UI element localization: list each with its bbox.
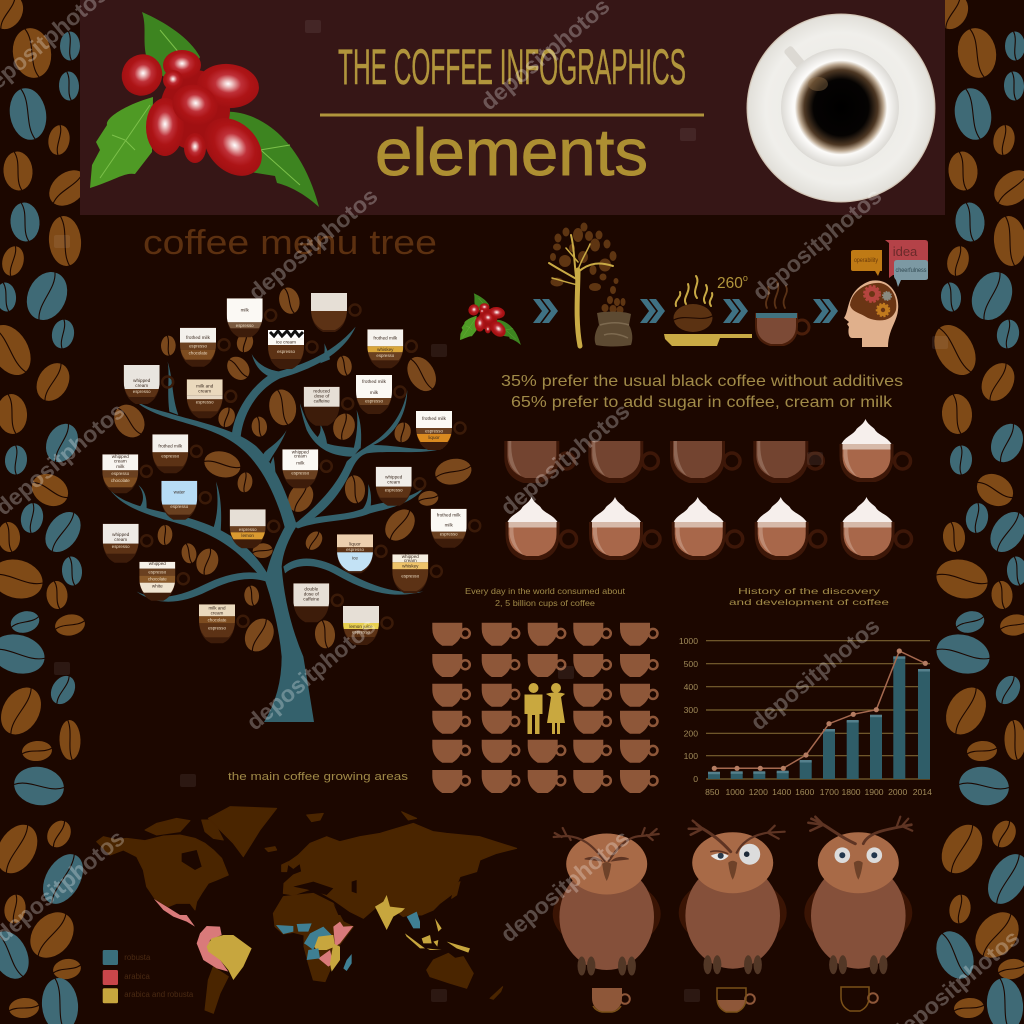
cup: reduced dose of caffeine: [304, 387, 353, 426]
heading: coffee menu tree: coffee menu tree: [143, 224, 437, 262]
cup: liquor espresso ice: ice: [352, 555, 358, 560]
x axis labels: 2000: [888, 787, 907, 797]
cup: whipped cream: cream: [135, 383, 148, 388]
cup: whipped cream whiskey: cream: [404, 558, 417, 563]
cup: liquor espresso ice: [337, 534, 386, 573]
cup: frothed milk liquor: [416, 411, 466, 450]
cup: reduced dose of caffeine: caffeine: [314, 399, 330, 404]
chart: world map: [97, 807, 517, 1013]
text: daily consumption: [465, 586, 626, 608]
cup: whipped cream milk chocolate: espresso: [111, 471, 130, 476]
icon: brewed cup with steam: [755, 282, 809, 346]
cup: reduced dose of caffeine: reduced: [313, 389, 330, 394]
cup: espresso with lemon: espresso: [239, 527, 257, 532]
cup: layered chocolate and milk: espresso: [148, 570, 167, 575]
cup: lemon juice: lemon juice: [349, 624, 373, 629]
cup: milk: espresso: [236, 323, 254, 328]
cup: frothed milk and milk: espresso: [365, 398, 383, 404]
icon: small berries: [460, 293, 521, 345]
text: preference statistics: 35% prefer the usual black coffee without additives: [501, 373, 903, 390]
x axis labels: 1900: [864, 787, 884, 797]
cup: water espresso: espresso: [170, 504, 189, 509]
cup: whipped cream milk chocolate: milk: [116, 464, 125, 469]
x axis labels: 1800: [841, 787, 861, 797]
cup: frothed milk and milk: [356, 375, 406, 414]
heading: history chart: and development of coffee: [729, 597, 889, 607]
legend: coffee species: [103, 950, 194, 1003]
icon: wide-awake owl: [804, 817, 912, 974]
cup: whipped cream espresso lower: [103, 524, 152, 563]
cup: whipped cream and milk: whipped: [292, 449, 309, 454]
icon: coffee berries and leaves: [90, 12, 319, 207]
chart: history bar and line chart: [679, 636, 932, 797]
text: daily consumption: Every day in the world consumed about: [465, 586, 626, 596]
cup: espresso with lemon: lemon: [241, 533, 254, 538]
cup: frothed milk and milk: frothed milk: [362, 379, 387, 384]
x axis labels: 1700: [820, 787, 839, 797]
legend: coffee species: robusta: [124, 953, 151, 962]
icon: roasted coffee bean: [674, 304, 712, 332]
cup: frothed milk liquor: liquor: [428, 435, 440, 440]
process: berry to cup: [460, 222, 928, 347]
cup: frothed milk chocolate: espresso: [189, 344, 207, 349]
cup: whipped cream whiskey: [392, 554, 442, 593]
cup: whipped cream milk chocolate: whipped: [112, 454, 129, 459]
cup: double dose of caffeine: [293, 583, 343, 622]
cup: water espresso: water: [174, 490, 185, 495]
text: daily consumption: 2, 5 billion cups of coffee: [495, 598, 595, 608]
tree beans: [108, 285, 474, 657]
cup: whipped cream: [124, 365, 173, 404]
cup: frothed milk, milk: [431, 509, 480, 548]
cup: whipped cream milk chocolate: cream: [114, 458, 127, 463]
icon: head with gears: [844, 280, 898, 347]
y axis labels: 200: [684, 728, 698, 738]
x axis labels: 1600: [795, 787, 814, 797]
cup: double dose of caffeine: dose of: [304, 591, 320, 596]
y axis labels: 400: [684, 682, 698, 692]
x axis labels: 1000: [725, 787, 745, 797]
arrow: chevrons 4: [813, 299, 838, 323]
icon: coffee tree: [549, 222, 616, 346]
cup: whipped cream whiskey: espresso: [401, 573, 420, 578]
y axis labels: 100: [684, 751, 698, 761]
cup: milk: [227, 298, 276, 337]
tree trunk and branches: [110, 327, 443, 722]
arrow: chevrons 3: [723, 299, 748, 323]
text: preference statistics: [501, 373, 903, 411]
title divider: [320, 114, 704, 116]
watermark: depositphotos: [495, 397, 634, 520]
cup: frothed milk liquor: frothed milk: [422, 416, 447, 421]
subtitle: elements: [375, 115, 648, 189]
x axis labels: [705, 787, 932, 797]
icon: half cup under half-awake owl: [717, 988, 755, 1012]
heading: growing areas: the main coffee growing areas: [228, 771, 408, 783]
watermark: depositphotos: [495, 824, 634, 947]
label: roast temperature: 260: [717, 275, 743, 292]
icon: coffee cup on saucer from above: [746, 14, 936, 202]
trend line: [714, 651, 925, 768]
cup: milk and cream: [187, 379, 236, 418]
cup: milk and cream: milk and: [196, 383, 214, 388]
watermark: depositphotos: [745, 612, 884, 735]
cup: frothed milk espresso: frothed milk: [158, 443, 183, 448]
cup: frothed milk chocolate: [180, 328, 230, 367]
cup: whipped cream milk chocolate: chocolate: [111, 478, 130, 483]
gridlines: [706, 641, 930, 779]
cup: milk and cream chocolate: milk and: [208, 605, 226, 610]
icon: idea speech bubbles: [851, 240, 928, 287]
cup: frothed milk espresso: espresso: [161, 453, 180, 458]
cup: whipped cream whiskey: whiskey: [402, 563, 419, 568]
cup: double dose of caffeine: double: [304, 586, 319, 591]
watermark: depositphotos: [747, 182, 886, 305]
cup: layered chocolate and milk: white: [152, 584, 163, 589]
bars: [708, 657, 930, 779]
chart: cup pictogram: [432, 623, 658, 793]
watermark: depositphotos: [241, 612, 380, 735]
cup: whipped cream espresso lower: cream: [114, 537, 127, 542]
cup: whipped cream and milk: milk: [296, 460, 305, 465]
panel: left coffee bean border: [0, 0, 94, 1024]
arabica and robusta regions: [207, 895, 470, 980]
cup: milk: milk: [241, 307, 249, 312]
cup: whipped cream milk chocolate: [102, 454, 152, 493]
cup: ice cream: ice cream: [276, 340, 296, 344]
cup: plain espresso with light top: [311, 293, 360, 332]
cup: frothed milk whiskey: frothed milk: [373, 335, 398, 340]
cup: frothed milk liquor: espresso: [425, 428, 443, 434]
cup: frothed milk chocolate: chocolate: [189, 351, 208, 356]
cup: liquor espresso ice: espresso: [346, 547, 364, 552]
cup: whipped cream espresso lower: espresso: [112, 544, 130, 549]
x axis labels: 850: [705, 787, 720, 797]
cup: milk and cream chocolate: cream: [211, 610, 224, 615]
icon: empty cup under wide-awake owl: [841, 987, 878, 1011]
cup: whipped cream espresso: cream: [387, 480, 400, 485]
icon: frying pan: [664, 334, 752, 346]
cup: whipped cream and milk: cream: [294, 453, 307, 458]
cup: water espresso: [161, 481, 211, 520]
cup: whipped cream espresso: espresso: [385, 488, 403, 493]
cup: whipped cream: whipped: [133, 378, 151, 383]
arabica regions: [154, 899, 353, 972]
cup: whipped cream: espresso: [133, 389, 151, 394]
cup: layered chocolate and milk: whipped: [149, 561, 166, 566]
watermark: depositphotos: [243, 182, 382, 305]
cup: reduced dose of caffeine: dose of: [314, 394, 330, 399]
cup: double dose of caffeine: caffeine: [303, 596, 320, 601]
cup: frothed milk whiskey: espresso: [376, 353, 395, 358]
cup: layered chocolate and milk: [139, 561, 189, 601]
water cut-outs: [182, 850, 357, 915]
heading: history chart: [729, 586, 889, 607]
cup: milk and cream: espresso: [196, 399, 214, 404]
icon: half-awake owl: [679, 821, 787, 974]
y axis labels: 300: [684, 705, 698, 715]
icon: steam over roasted bean: [676, 276, 712, 306]
cup: milk and cream chocolate: espresso: [208, 625, 226, 630]
land: [97, 807, 517, 1013]
icon: sleepy owl: [553, 828, 661, 976]
arrow: chevrons 2: [640, 299, 665, 323]
cup: frothed milk, milk: milk: [445, 523, 453, 528]
legend: coffee species: arabica and robusta: [124, 990, 194, 999]
cup: whipped cream espresso lower: whipped: [112, 532, 130, 537]
cup: milk and cream: cream: [198, 388, 211, 393]
cup: ice cream: [268, 330, 318, 369]
cup: lemon juice: [343, 606, 392, 645]
cup: frothed milk chocolate: frothed milk: [186, 335, 211, 340]
cup: frothed milk and milk: milk: [370, 390, 379, 395]
x axis labels: 1400: [772, 787, 791, 797]
arrow: chevrons 1: [533, 299, 558, 323]
legend: coffee species: arabica: [124, 972, 151, 981]
x axis labels: 1200: [749, 787, 768, 797]
icon: coffee sack: [595, 278, 632, 346]
y axis labels: 1000: [679, 636, 698, 646]
icon: full cup under sleepy owl: [592, 988, 630, 1012]
panel: right coffee bean border: [926, 0, 1024, 1024]
y axis labels: 0: [693, 774, 698, 784]
icon: idea speech bubbles: cheerfulness: [896, 268, 926, 274]
icon: idea speech bubbles: operability: [854, 257, 879, 264]
cup: frothed milk espresso: [152, 434, 202, 473]
panel: header band: [80, 0, 945, 215]
cup: ice cream: espresso: [277, 349, 295, 354]
cup: milk and cream chocolate: [199, 604, 248, 643]
cup: milk and cream chocolate: chocolate: [208, 617, 227, 622]
cup: espresso with lemon: [230, 509, 279, 548]
trend markers: [712, 648, 928, 771]
cup: whipped cream espresso: [376, 467, 425, 506]
cup: whipped cream whiskey: whipped: [402, 554, 419, 559]
label: roast temperature: o: [743, 273, 748, 283]
chart: 10 cups black versus with additives: [504, 419, 912, 560]
cup: frothed milk whiskey: whiskey: [377, 347, 394, 352]
cup: layered chocolate and milk: chocolate: [148, 577, 167, 582]
cup: frothed milk, milk: frothed milk: [437, 513, 461, 518]
cup: lemon juice: espresso: [352, 630, 370, 634]
cup: frothed milk, milk: espresso: [440, 532, 458, 537]
cup: liquor espresso ice: liquor: [349, 541, 361, 546]
y axis labels: [679, 636, 698, 784]
robusta regions: [276, 912, 420, 971]
cup: frothed milk whiskey: [367, 329, 417, 368]
chart: coffee menu tree: [102, 285, 480, 722]
text: preference statistics: 65% prefer to add sugar in coffee, cream or milk: [511, 394, 893, 411]
heading: history chart: History of the discovery: [738, 586, 881, 596]
cup: whipped cream and milk: espresso: [291, 470, 310, 475]
icon: man and woman: [524, 683, 565, 734]
y axis labels: 500: [684, 659, 698, 669]
icon: idea speech bubbles: idea: [893, 244, 918, 259]
cup: whipped cream espresso: whipped: [385, 475, 403, 480]
cup: whipped cream and milk: [282, 449, 332, 488]
bar tops: [708, 656, 930, 774]
x axis labels: 2014: [913, 787, 932, 797]
